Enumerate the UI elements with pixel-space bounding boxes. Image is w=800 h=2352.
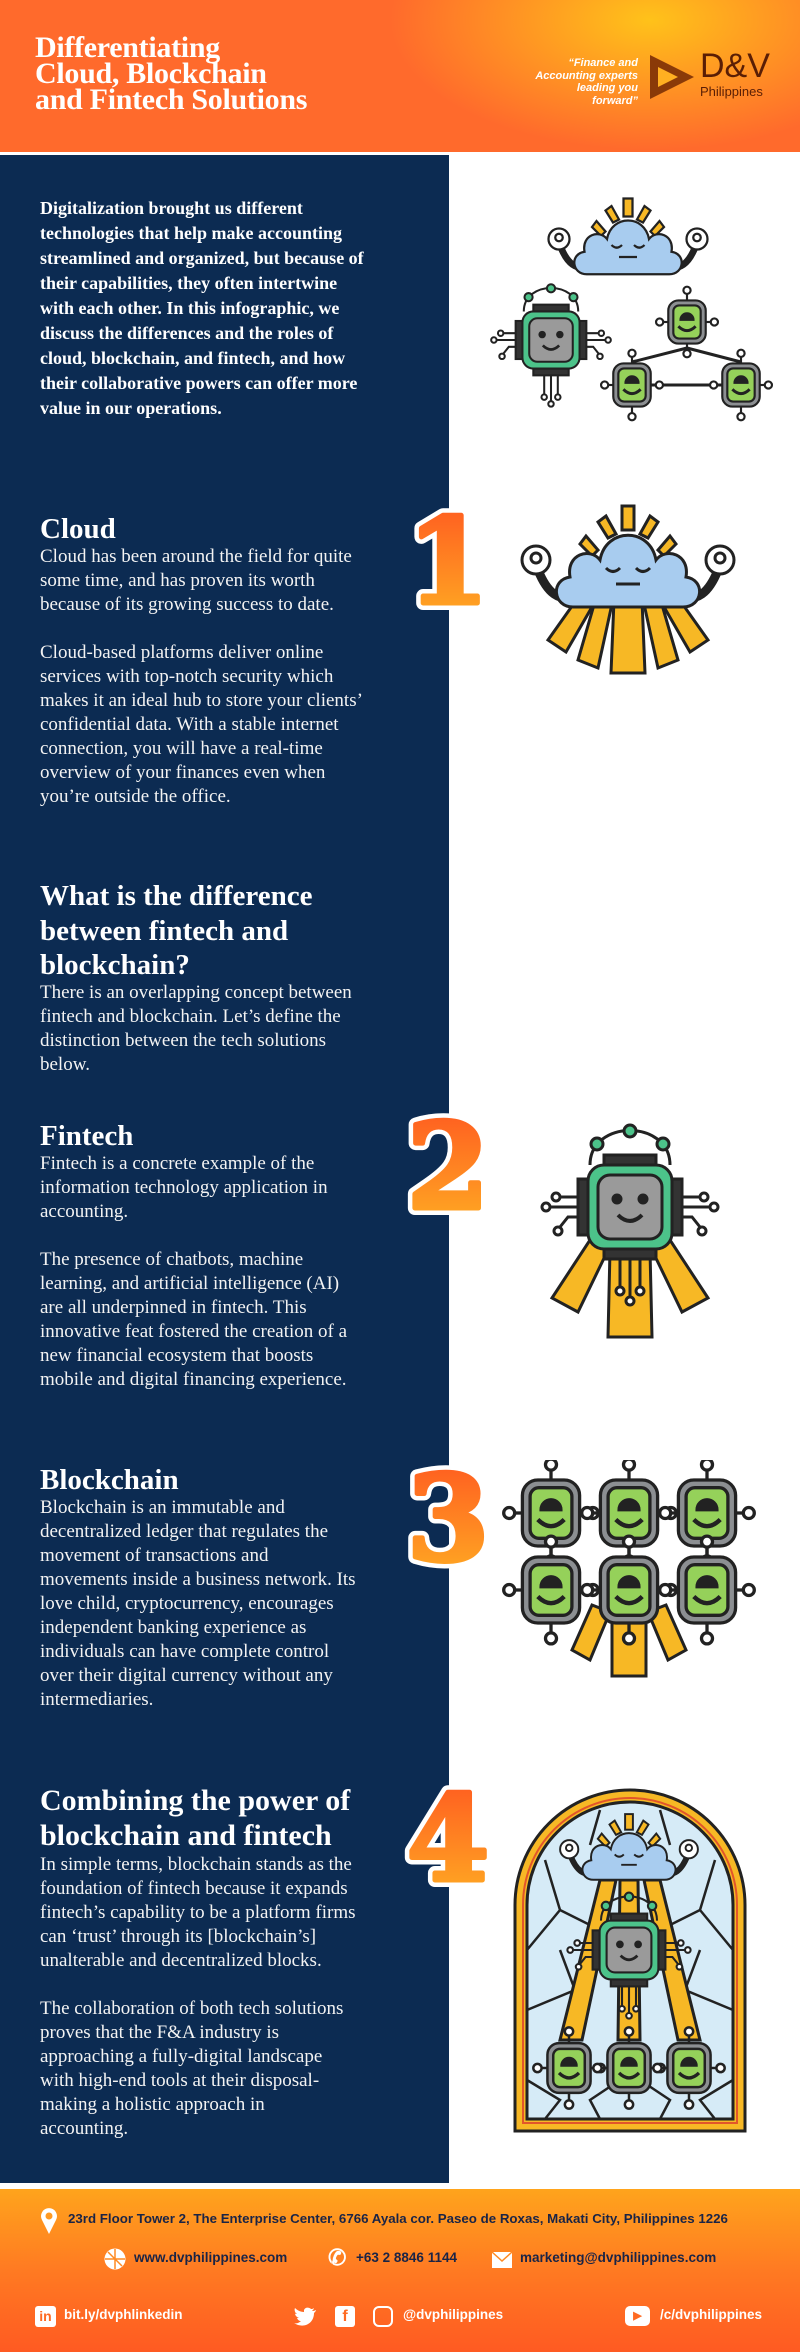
social row (35, 2306, 762, 2327)
address: 23rd Floor Tower 2, The Enterprise Center, 6766 Ayala cor. Paseo de Roxas, Makati City, Philippines 1226 (68, 2211, 728, 2226)
combining body text: making a holistic approach in (40, 2094, 265, 2115)
address (41, 2208, 728, 2234)
logo: D&V (700, 47, 770, 85)
contact row: marketing@dvphilippines.com (520, 2250, 716, 2265)
intro text: Digitalization brought us different (40, 198, 303, 218)
intro text: streamlined and organized, but because of (40, 248, 364, 268)
fintech body text: mobile and digital financing experience. (40, 1369, 347, 1390)
title: Cloud, Blockchain (35, 57, 267, 90)
intro text (40, 198, 364, 418)
cloud body text: confidential data. With a stable internet (40, 714, 339, 735)
blockchain body text: independent banking experience as (40, 1617, 306, 1638)
combining body text: accounting. (40, 2118, 128, 2139)
section: difference heading: between fintech and (40, 914, 288, 946)
cloud body text: Cloud has been around the field for quite (40, 546, 352, 567)
icon: meditating cloud (520, 504, 736, 674)
combining body text: approaching a fully-digital landscape (40, 2046, 322, 2067)
section: difference heading: blockchain? (40, 949, 190, 981)
combining body text: The collaboration of both tech solutions (40, 1998, 343, 2019)
fintech body text: Fintech is a concrete example of the (40, 1153, 314, 1174)
blockchain body text: individuals can have complete control (40, 1641, 329, 1662)
intro text: value in our operations. (40, 398, 222, 418)
icon: blockchain grid (502, 1460, 756, 1678)
social row: @dvphilippines (403, 2307, 503, 2322)
blockchain body text: movements inside a business network. Its (40, 1569, 356, 1590)
blockchain body text: Blockchain is an immutable and (40, 1497, 285, 1518)
cloud body text: Cloud-based platforms deliver online (40, 642, 323, 663)
icon: youtube (625, 2306, 650, 2326)
icon: facebook (335, 2306, 355, 2327)
icon: youtube: ▶ (633, 2310, 642, 2322)
icon: linkedin (35, 2306, 56, 2327)
cloud body text: makes it an ideal hub to store your clients’ (40, 690, 363, 711)
intro text: discuss the differences and the roles of (40, 323, 333, 343)
panel: navy content column (0, 155, 449, 2183)
fintech body text: are all underpinned in fintech. This (40, 1297, 307, 1318)
intro text: their collaborative powers can offer more (40, 373, 357, 393)
difference body text: There is an overlapping concept between (40, 982, 352, 1003)
section: difference heading: What is the difference (40, 880, 312, 912)
section: blockchain heading: Blockchain (40, 1464, 179, 1496)
fintech body text: learning, and artificial intelligence (AI) (40, 1273, 339, 1294)
cloud body text: connection, you will have a real-time (40, 738, 323, 759)
intro text: their capabilities, they often intertwine (40, 273, 337, 293)
intro text: cloud, blockchain, and fintech, and how (40, 348, 345, 368)
difference body text: distinction between the tech solutions (40, 1030, 326, 1051)
icon: stained glass window (514, 1788, 746, 2132)
section: combining heading: blockchain and fintech (40, 1818, 332, 1852)
cloud body text (40, 546, 363, 807)
blockchain body text (40, 1497, 356, 1710)
combining body text: foundation of fintech because it expands (40, 1878, 348, 1899)
logo: Philippines (700, 84, 763, 99)
title: Differentiating (35, 31, 220, 64)
combining body text: can ‘trust’ through its [blockchain’s] (40, 1926, 316, 1947)
icon: instagram (373, 2306, 393, 2327)
difference body text: fintech and blockchain. Let’s define the (40, 1006, 341, 1027)
blockchain body text: love child, cryptocurrency, encourages (40, 1593, 334, 1614)
cloud body text: services with top-notch security which (40, 666, 333, 687)
section: combining heading (40, 1784, 351, 1852)
combining body text: with high-end tools at their disposal- (40, 2070, 319, 2091)
intro illustration (490, 197, 773, 422)
difference body text: below. (40, 1054, 90, 1075)
contact row: www.dvphilippines.com (134, 2250, 287, 2265)
cloud body text: some time, and has proven its worth (40, 570, 315, 591)
fintech body text: accounting. (40, 1201, 128, 1222)
icon: chip robot (540, 1124, 720, 1338)
cloud body text: you’re outside the office. (40, 786, 231, 807)
social row: bit.ly/dvphlinkedin (64, 2307, 183, 2322)
tagline: “Finance and Accounting experts leading you forward” (535, 57, 638, 106)
title: and Fintech Solutions (35, 83, 307, 116)
intro text: with each other. In this infographic, we (40, 298, 339, 318)
blockchain body text: over their digital currency without any (40, 1665, 333, 1686)
combining body text: In simple terms, blockchain stands as the (40, 1854, 352, 1875)
header banner (0, 0, 800, 152)
icon: facebook: f (342, 2308, 348, 2325)
difference body text (40, 982, 352, 1075)
section: fintech heading: Fintech (40, 1120, 133, 1152)
icon: phone: ✆ (328, 2245, 346, 2270)
fintech body text: innovative feat fostered the creation of a (40, 1321, 347, 1342)
icon: linkedin: in (39, 2308, 52, 2324)
blockchain body text: intermediaries. (40, 1689, 153, 1710)
icon: location pin (41, 2208, 57, 2234)
fintech body text: information technology application in (40, 1177, 328, 1198)
title (35, 31, 307, 116)
section: difference heading (40, 880, 312, 981)
icon: twitter (294, 2308, 316, 2326)
footer (0, 2189, 800, 2352)
logo (650, 47, 770, 99)
fintech body text (40, 1153, 347, 1390)
combining body text: unalterable and decentralized blocks. (40, 1950, 322, 1971)
cloud body text: overview of your finances even when (40, 762, 325, 783)
fintech body text: new financial ecosystem that boosts (40, 1345, 313, 1366)
contact row (104, 2245, 716, 2270)
combining body text: proves that the F&A industry is (40, 2022, 279, 2043)
blockchain body text: decentralized ledger that regulates the (40, 1521, 328, 1542)
section: cloud heading: Cloud (40, 513, 116, 545)
social row: /c/dvphilippines (660, 2307, 762, 2322)
combining body text: fintech’s capability to be a platform firms (40, 1902, 356, 1923)
contact row: +63 2 8846 1144 (356, 2250, 457, 2265)
icon: globe (104, 2248, 126, 2270)
blockchain body text: movement of transactions and (40, 1545, 268, 1566)
icon: email (492, 2252, 512, 2268)
fintech body text: The presence of chatbots, machine (40, 1249, 303, 1270)
cloud body text: because of its growing success to date. (40, 594, 334, 615)
combining body text (40, 1854, 356, 2139)
section: combining heading: Combining the power of (40, 1784, 350, 1817)
intro text: technologies that help make accounting (40, 223, 342, 243)
